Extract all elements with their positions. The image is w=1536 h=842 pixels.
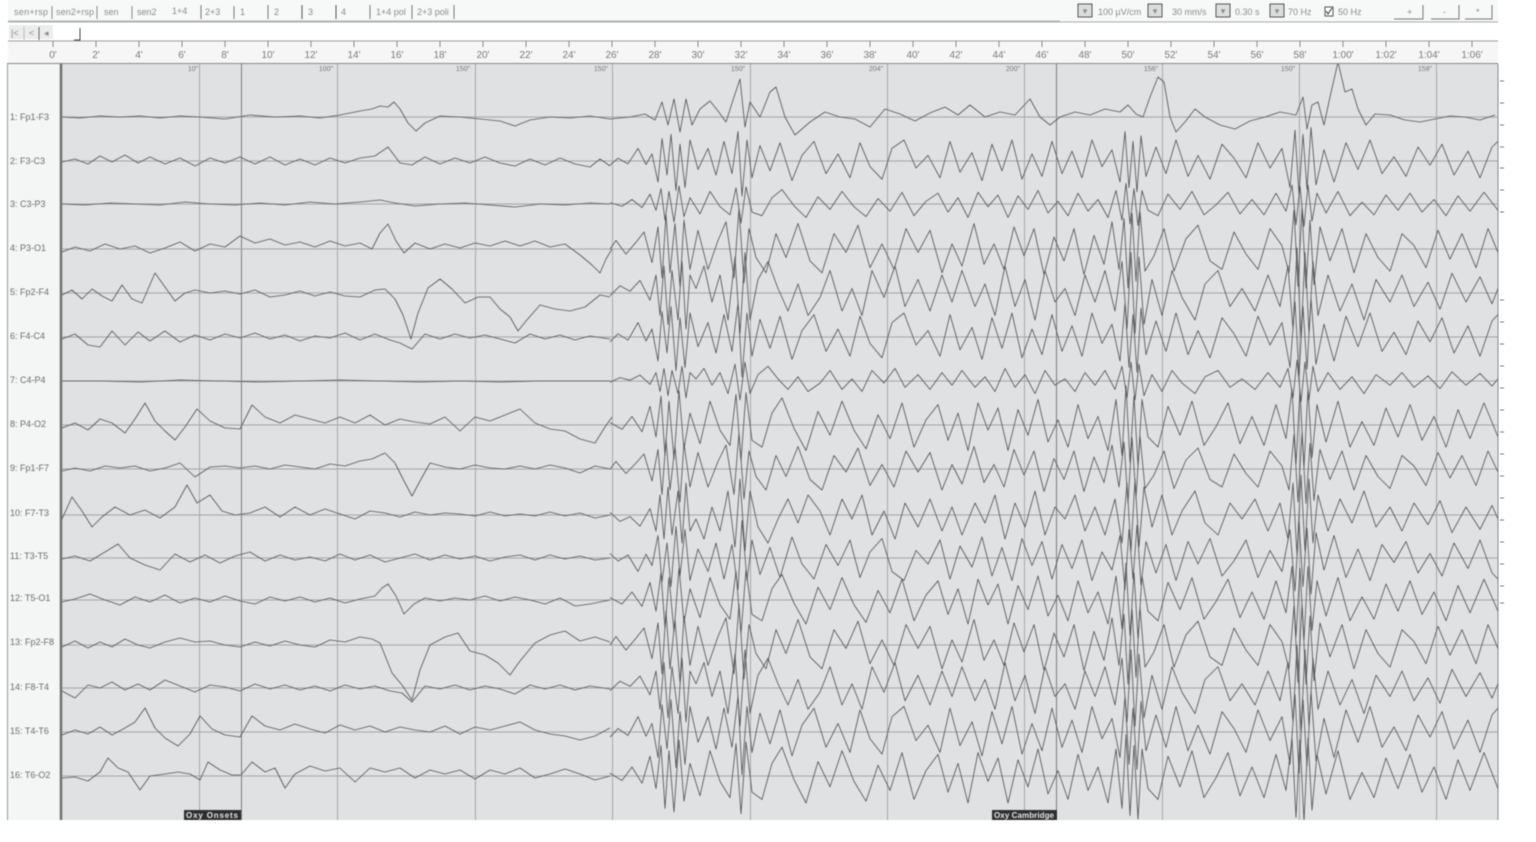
channel label column: 12: T5-O1 <box>10 593 50 603</box>
time ruler: 0' <box>49 50 57 61</box>
channel label column: 2: F3-C3 <box>10 156 45 166</box>
tab row: sen+rsp <box>14 7 48 17</box>
time ruler: 6' <box>178 50 186 61</box>
right scale ticks <box>1500 81 1504 603</box>
trace: channel 11 T3-T5 <box>62 520 1498 594</box>
channel label column: 13: Fp2-F8 <box>10 637 54 647</box>
display controls: 70 Hz <box>1288 7 1312 17</box>
trace: channel 6 F4-C4 <box>62 299 1498 377</box>
time markers: 150" <box>731 66 746 73</box>
time ruler: 42' <box>949 50 963 61</box>
display controls <box>1078 4 1362 17</box>
time ruler: 50' <box>1121 50 1135 61</box>
trace: channel 13 Fp2-F8 <box>62 604 1498 700</box>
time ruler: 16' <box>390 50 404 61</box>
time ruler: 56' <box>1250 50 1264 61</box>
time ruler: 58' <box>1293 50 1307 61</box>
zoom buttons: + <box>1407 7 1412 17</box>
time ruler: 12' <box>304 50 318 61</box>
time ruler: 8' <box>221 50 229 61</box>
time ruler: 18' <box>433 50 447 61</box>
time ruler: 36' <box>820 50 834 61</box>
navigation row: |< <box>11 28 19 38</box>
time markers: 150" <box>1281 66 1296 73</box>
channel label column: 11: T3-T5 <box>10 551 48 561</box>
time ruler: 14' <box>347 50 361 61</box>
channel label column: 14: F8-T4 <box>10 682 49 692</box>
time markers: 150" <box>456 66 471 73</box>
trace: channel 15 T4-T6 <box>62 691 1498 774</box>
tab row: sen2+rsp <box>56 7 94 17</box>
time ruler: 38' <box>863 50 877 61</box>
zoom buttons: - <box>1443 7 1446 17</box>
display controls: 30 mm/s <box>1172 7 1207 17</box>
tab row <box>14 5 454 19</box>
time ruler: 2' <box>92 50 100 61</box>
channel label column: 6: F4-C4 <box>10 331 45 341</box>
tab row: 1 <box>240 7 245 17</box>
time ruler: 24' <box>562 50 576 61</box>
trace: channel 16 T6-O2 <box>62 735 1498 821</box>
time markers: 158" <box>1418 66 1433 73</box>
time markers: 100" <box>319 66 334 73</box>
time ruler: 20' <box>476 50 490 61</box>
time ruler: 26' <box>605 50 619 61</box>
bottom marker: termination: Oxy Cambridge <box>994 811 1055 820</box>
time ruler: 1:06' <box>1461 50 1483 61</box>
trace: channel 1 Fp1-F3 <box>62 62 1495 135</box>
time ruler: 4' <box>135 50 143 61</box>
time ruler: 30' <box>691 50 705 61</box>
bottom marker: onset: Oxy Onsets <box>186 811 239 820</box>
time markers: 150" <box>594 66 609 73</box>
channel label column: 9: Fp1-F7 <box>10 463 49 473</box>
channel label column: 5: Fp2-F4 <box>10 287 49 297</box>
tab row: sen2 <box>137 7 157 17</box>
time ruler: 40' <box>906 50 920 61</box>
channel label column: 10: F7-T3 <box>10 508 49 518</box>
navigation row: ◂ <box>44 28 49 38</box>
zoom buttons <box>1394 5 1492 19</box>
time markers: 10" <box>188 66 199 73</box>
trace: channel 14 F8-T4 <box>62 646 1498 730</box>
zoom buttons: * <box>1476 7 1480 17</box>
time ruler: 32' <box>734 50 748 61</box>
tab row: 2 <box>274 7 279 17</box>
trace: channel 7 C4-P4 <box>62 360 1498 402</box>
time ruler: 54' <box>1207 50 1221 61</box>
channel label column: 3: C3-P3 <box>10 199 46 209</box>
tab row: sen <box>104 7 119 17</box>
tab row: 2+3 <box>205 7 220 17</box>
trace: channel 8 P4-O2 <box>62 386 1498 468</box>
time ruler: 22' <box>519 50 533 61</box>
channel label column: 16: T6-O2 <box>10 770 50 780</box>
display controls: 50 Hz <box>1338 7 1362 17</box>
trace: channel 3 C3-P3 <box>62 183 1498 226</box>
trace: channel 12 T5-O1 <box>62 563 1498 640</box>
channel label column: 7: C4-P4 <box>10 375 46 385</box>
channel label column: 8: P4-O2 <box>10 419 46 429</box>
time ruler: 34' <box>777 50 791 61</box>
navigation row: < <box>29 28 34 38</box>
trace: channel 2 F3-C3 <box>62 127 1498 196</box>
toolbar <box>8 0 1498 22</box>
display controls: ▾ <box>1083 6 1088 16</box>
time markers <box>188 66 1433 73</box>
channel label column: 1: Fp1-F3 <box>10 112 49 122</box>
trace: channel 4 P3-O1 <box>62 208 1498 288</box>
tab row: 4 <box>341 7 346 17</box>
tab row: 1+4 <box>172 6 187 16</box>
display controls: 0.30 s <box>1235 7 1260 17</box>
trace: channel 9 Fp1-F7 <box>62 433 1498 504</box>
display controls: ▾ <box>1221 6 1226 16</box>
time ruler: 10' <box>261 50 275 61</box>
time ruler: 48' <box>1078 50 1092 61</box>
time ruler: 44' <box>992 50 1006 61</box>
tab row: 3 <box>308 7 313 17</box>
time markers: 200" <box>1006 66 1021 73</box>
display controls: ▾ <box>1275 6 1280 16</box>
tab row: 1+4 pol <box>376 7 406 17</box>
time ruler: 1:00' <box>1332 50 1354 61</box>
trace: channel 10 F7-T3 <box>62 475 1498 555</box>
time ruler: 1:04' <box>1418 50 1440 61</box>
display controls: 100 µV/cm <box>1098 7 1141 17</box>
trace: channel 5 Fp2-F4 <box>62 248 1498 339</box>
time markers: 204" <box>869 66 884 73</box>
tab row: 2+3 poli <box>417 7 449 17</box>
time ruler: 52' <box>1164 50 1178 61</box>
display controls: ▾ <box>1153 6 1158 16</box>
time ruler: 46' <box>1035 50 1049 61</box>
time ruler: 1:02' <box>1375 50 1397 61</box>
channel label column: 15: T4-T6 <box>10 726 49 736</box>
time ruler <box>8 41 1498 63</box>
navigation row <box>8 22 1498 40</box>
time markers: 156" <box>1144 66 1159 73</box>
channel label column: 4: P3-O1 <box>10 243 46 253</box>
time ruler: 28' <box>648 50 662 61</box>
